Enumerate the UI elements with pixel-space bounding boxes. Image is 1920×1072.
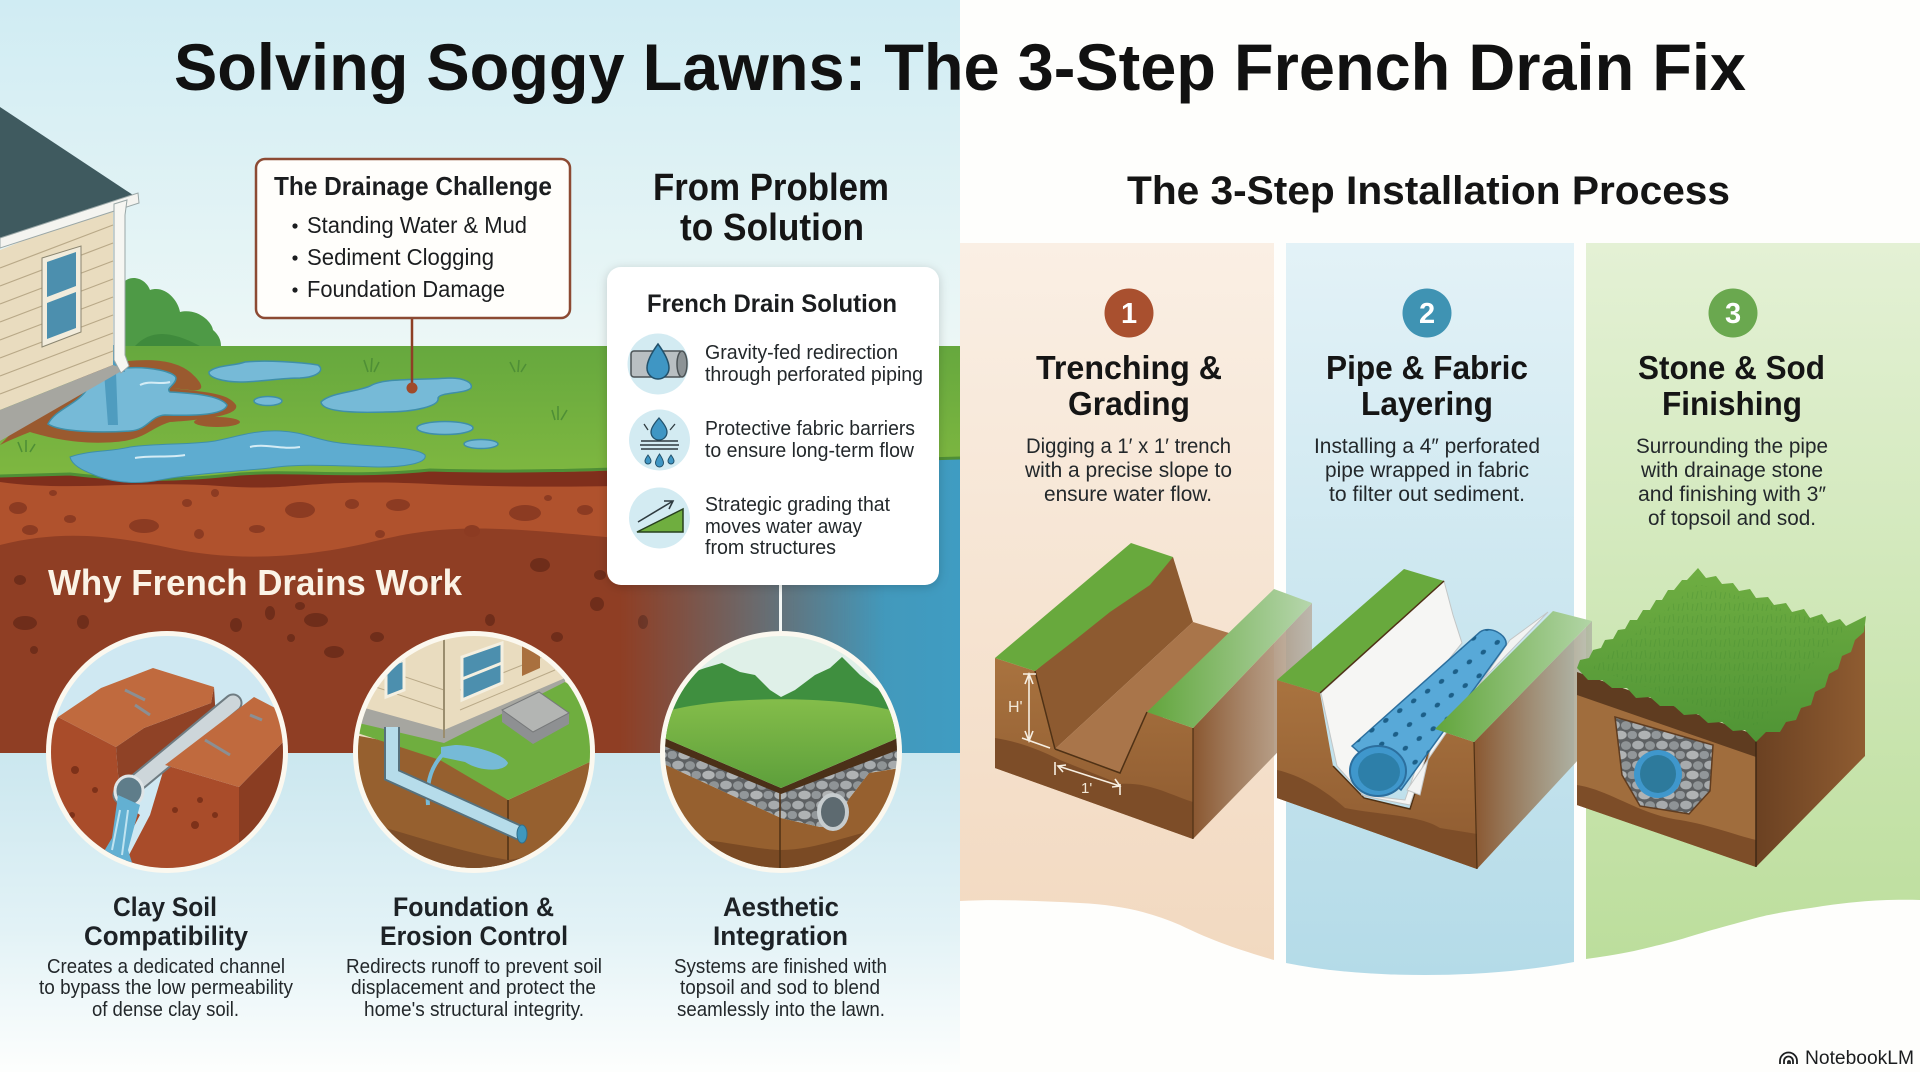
text: clay soil compatibility: Compatibility <box>84 921 248 951</box>
step 1 text: with a precise slope to <box>1024 459 1232 482</box>
text: aesthetic integration: Aesthetic <box>723 892 839 922</box>
text: clay soil compatibility <box>39 892 293 1021</box>
text: foundation and erosion control: displacement and protect the <box>351 977 596 999</box>
step 1 text: ensure water flow. <box>1044 483 1212 506</box>
text: strategic grading <box>705 494 890 559</box>
heading: from problem to solution: From Problem <box>653 167 889 209</box>
step 3 number badge: 3 <box>1725 298 1741 330</box>
panel: step 3 background <box>1586 243 1920 959</box>
text: foundation and erosion control: Erosion Control <box>380 921 568 951</box>
step 2 number badge: 2 <box>1419 298 1435 330</box>
grass tufts <box>18 358 567 452</box>
heading: why french drains work: Why French Drains Work <box>48 562 463 603</box>
panel: step 2 background <box>1286 243 1574 975</box>
text: aesthetic integration: Systems are finished with <box>674 956 887 978</box>
step 3 text: with drainage stone <box>1640 459 1823 482</box>
text: foundation and erosion control <box>346 892 602 1021</box>
step 2 text: to filter out sediment. <box>1329 483 1525 506</box>
text: strategic grading: Strategic grading that <box>705 494 890 516</box>
heading: from problem to solution: to Solution <box>680 207 864 249</box>
background: left sky <box>0 0 960 346</box>
step 2 text: Installing a 4″ perforated <box>1314 435 1540 458</box>
step 1 number badge <box>1104 288 1154 338</box>
step 3 text: of topsoil and sod. <box>1648 507 1816 530</box>
perforated pipe <box>1350 630 1506 796</box>
step 1 number badge: 1 <box>1121 298 1137 330</box>
callout bullet list <box>292 212 527 302</box>
sod surface <box>1577 568 1866 742</box>
text: gravity-fed redirection: through perforated piping <box>705 364 923 386</box>
background: right white panel <box>960 0 1920 1072</box>
soil cross-section <box>0 470 871 753</box>
text: gravity-fed redirection <box>705 342 923 386</box>
notebooklm watermark: NotebookLM <box>1805 1048 1914 1069</box>
step 1 text: Grading <box>1068 385 1190 422</box>
callout bullet list: Sediment Clogging <box>307 244 494 270</box>
text: foundation and erosion control: Redirects runoff to prevent soil <box>346 956 602 978</box>
heading: from problem to solution <box>653 167 889 249</box>
lawn <box>0 346 960 479</box>
dimension marks <box>1008 674 1120 797</box>
circle illustration: foundation pipe <box>353 631 595 880</box>
step 3 text <box>1636 349 1828 530</box>
text: protective fabric barriers: to ensure long-term flow <box>705 440 915 462</box>
text: clay soil compatibility: to bypass the low permeability <box>39 977 293 999</box>
connector from card to circle <box>779 585 782 633</box>
text: protective fabric barriers: Protective fabric barriers <box>705 418 915 440</box>
puddles <box>48 361 498 448</box>
text: foundation and erosion control: Foundation & <box>393 892 554 922</box>
stone fill <box>1615 717 1713 814</box>
heading: the 3-step installation process: The 3-Step Installation Process <box>1127 169 1730 213</box>
step 2 text: pipe wrapped in fabric <box>1325 459 1529 482</box>
circle illustration: finished lawn <box>660 631 902 880</box>
bushes <box>119 278 221 346</box>
step 3 text: Stone & Sod <box>1638 349 1825 386</box>
text: protective fabric barriers <box>705 418 915 462</box>
circle illustration: clay soil pipe <box>46 631 290 874</box>
step 3 number badge <box>1708 288 1758 338</box>
text: strategic grading: moves water away <box>705 516 862 538</box>
roof fascia <box>0 193 139 248</box>
callout: the drainage challenge <box>256 159 570 394</box>
mud around downspout <box>0 360 236 445</box>
house wall <box>0 205 113 410</box>
callout heading: The Drainage Challenge <box>274 171 552 201</box>
text: clay soil compatibility: Clay Soil <box>113 892 217 922</box>
illustration: waterlogged lawn scene <box>0 107 960 753</box>
diagram: open trench block <box>995 543 1312 839</box>
card heading: French Drain Solution <box>647 290 897 318</box>
text: foundation and erosion control: home's structural integrity. <box>364 999 584 1021</box>
title: Solving Soggy Lawns: The 3-Step French Drain Fix <box>174 30 1746 104</box>
text: clay soil compatibility: Creates a dedicated channel <box>47 956 285 978</box>
panel: step 1 background <box>960 243 1274 960</box>
icon: graded slope arrow <box>629 488 690 548</box>
house roof <box>0 107 136 238</box>
background: lower left pale water <box>0 753 960 1072</box>
step 2 text: Pipe & Fabric <box>1326 349 1528 386</box>
callout bullet list: Standing Water & Mud <box>307 212 527 238</box>
text: aesthetic integration: Integration <box>713 921 848 951</box>
icon: fabric filter with drops <box>629 410 690 470</box>
step 2 text <box>1314 349 1540 506</box>
text: aesthetic integration <box>674 892 887 1021</box>
dimension marks: 1' <box>1081 780 1092 797</box>
text: clay soil compatibility: of dense clay soil. <box>92 999 239 1021</box>
diagram: stone and sod block <box>1577 568 1866 867</box>
text: aesthetic integration: seamlessly into the lawn. <box>677 999 885 1021</box>
step 3 text: and finishing with 3″ <box>1638 483 1827 506</box>
house foundation <box>0 365 125 441</box>
house window <box>42 246 81 347</box>
text: aesthetic integration: topsoil and sod to blend <box>680 977 880 999</box>
step 1 text: Trenching & <box>1036 349 1222 386</box>
step 3 text: Surrounding the pipe <box>1636 435 1828 458</box>
downspout <box>114 200 129 373</box>
panel: french drain solution card <box>607 267 939 585</box>
fabric wrap <box>1321 581 1462 805</box>
step 1 text: Digging a 1′ x 1′ trench <box>1026 435 1231 458</box>
icon: pipe with water drop <box>628 334 688 394</box>
text: strategic grading: from structures <box>705 537 836 559</box>
step 2 text: Layering <box>1361 385 1493 422</box>
step 2 number badge <box>1402 288 1452 338</box>
step 3 text: Finishing <box>1662 385 1802 422</box>
callout bullet list: Foundation Damage <box>307 276 505 302</box>
text: gravity-fed redirection: Gravity-fed redirection <box>705 342 898 364</box>
dimension marks: H' <box>1008 699 1023 716</box>
water band behind the soil <box>600 450 960 753</box>
pipe cross-section <box>1634 750 1682 798</box>
step 1 text <box>1024 349 1232 506</box>
diagram: pipe and fabric block <box>1277 569 1592 869</box>
